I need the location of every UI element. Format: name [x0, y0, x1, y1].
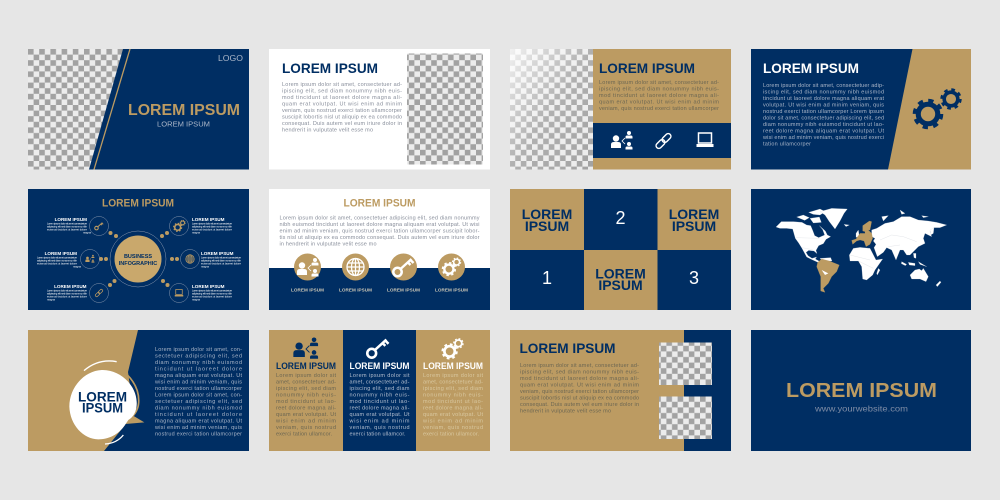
icon: gears badge [438, 254, 465, 280]
right labels: magna [201, 266, 209, 268]
panel: slide 10 three columns [269, 330, 490, 451]
panel: slide 11 text and two photos [510, 330, 731, 451]
right labels: Lorem ipsum dolor sit amet consectetuer [192, 288, 232, 292]
center hub: BUSINESS [124, 254, 152, 260]
panel: slide 4 text and gears [751, 49, 971, 170]
left labels: Lorem ipsum dolor sit amet consectetuer [47, 222, 87, 226]
icon rings [80, 216, 200, 302]
column: second: nonummy nibh euis- [350, 392, 410, 398]
column: third: amet, consectetuer ad- [423, 380, 483, 386]
body text: nostrud exerci tation ullamcorper [155, 386, 242, 392]
panel: slide 2 text and photo [269, 49, 490, 170]
left labels: adipiscing elit sed diam nonummy nibh [47, 292, 88, 296]
column: third: Lorem ipsum dolor sit [423, 373, 483, 379]
body text: quam erat volutpat. Ut wisi enim ad minim [520, 382, 639, 388]
icon captions: LOREM IPSUM [339, 288, 372, 292]
body text: dolor sit amet, consectetuer adipiscing elit, sed [763, 116, 884, 122]
left labels: adipiscing elit sed diam nonummy nibh [47, 224, 88, 228]
gold diagonal stripe [94, 49, 130, 170]
right labels: LOREM IPSUM [201, 251, 234, 256]
body text: iscing elit, sed diam nonummy nibh euismod [763, 90, 884, 96]
column: second: mod tincidunt ut lao- [350, 399, 410, 405]
body text: veniam, quis nostrud exerci tation ullamcorper [599, 106, 719, 112]
tile text top left: IPSUM [525, 218, 569, 234]
column: first: amet, consectetuer ad- [276, 380, 336, 386]
tile text bottom center: LOREM [595, 266, 646, 282]
body text: quam erat volutpat. Ut wisi enim ad minim [599, 100, 719, 106]
icon: laptop [696, 133, 714, 147]
heading: LOREM IPSUM [102, 198, 174, 210]
left labels: euismod tincidunt ut laoreet dolore [47, 294, 88, 298]
column: first: veniam, quis nostrud [276, 425, 336, 431]
column: third: ipiscing elit, sed diam [423, 386, 483, 392]
tile text top right [669, 206, 719, 234]
left labels: euismod tincidunt ut laoreet dolore [47, 228, 88, 232]
body text: Lorem ipsum dolor sit amet, con- [155, 392, 242, 398]
column: third: quam erat volutpat. Ut [423, 412, 483, 418]
body text: mod tincidunt ut laoreet dolore magna ali- [282, 95, 402, 101]
right labels: euismod tincidunt ut laoreet dolore [201, 262, 242, 266]
column: first: LOREM IPSUM [276, 361, 336, 371]
body text: hendrerit in vulputate velit esse mo [520, 408, 611, 414]
heading: LOREM IPSUM [282, 60, 378, 76]
world map [776, 208, 947, 292]
icon captions: LOREM IPSUM [387, 288, 420, 292]
right labels: euismod tincidunt ut laoreet dolore [192, 294, 233, 298]
body text: enim ad minim veniam, quis nostrud exerci tation ullamcorper suscipit lobor- [280, 228, 480, 234]
center hub: INFOGRAPHIC [119, 261, 157, 267]
heading: LOREM IPSUM [599, 60, 695, 76]
body text: diam nonummy nibh euismod [155, 360, 242, 366]
column: first [269, 330, 343, 451]
column: third: LOREM IPSUM [423, 361, 483, 371]
column: second: LOREM IPSUM [350, 361, 410, 371]
body text: tincidunt ut laoreet dolore magna aliquam erat [763, 96, 884, 102]
panel: slide 9 speech bubble [28, 330, 249, 451]
body text: wisi enim ad minim veniam, quis [154, 380, 242, 386]
body text: Lorem ipsum dolor sit amet, consectetuer ad- [520, 363, 639, 369]
tile text top right: LOREM [669, 206, 719, 222]
panel: slide 12 closing [751, 330, 971, 451]
panel: slide 5 business infographic [28, 189, 249, 310]
column: second: ipiscing elit, sed diam [350, 386, 410, 392]
body text: suscipit lobortis nisl ut aliquip ex ea commodo [520, 396, 639, 402]
body text: hendrerit in vulputate velit esse mo [282, 128, 373, 134]
body text: tincidunt ut laoreet dolore [155, 412, 242, 418]
column: third: veniam, quis nostrud [423, 425, 483, 431]
column: first: mod tincidunt ut lao- [276, 399, 336, 405]
left labels: Lorem ipsum dolor sit amet consectetuer [37, 256, 77, 260]
body text: nibh euismod tincidunt ut laoreet dolore magna aliquam erat volutpat. Ut wisi [280, 222, 480, 228]
icon: key badge [390, 254, 417, 280]
icon: link [655, 132, 672, 150]
left labels: LOREM IPSUM [54, 284, 87, 289]
body text: quam erat volutpat. Ut wisi enim ad minim [282, 102, 402, 108]
column: third: nonummy nibh euis- [423, 392, 483, 398]
body text: wisi enim ad minim veniam, quis nostrud exerci [762, 135, 884, 141]
body text: consequat. Duis autem vel eum iriure dolor in [520, 402, 639, 408]
ring icons [85, 220, 194, 297]
body text: wisi enim ad minim veniam, quis [154, 425, 242, 431]
number 3: 3 [689, 268, 699, 288]
photo placeholder bottom [659, 396, 712, 439]
column: second: wisi enim ad minim [348, 418, 410, 424]
left labels: LOREM IPSUM [45, 251, 77, 256]
body text: diam nonummy nibh euismod [155, 406, 242, 412]
body text: reet dolore magna aliquam erat volutpat. Ut [763, 128, 884, 134]
body text [154, 347, 242, 438]
left labels [37, 217, 91, 302]
body text: mod tincidunt ut laoreet dolore magna ali- [599, 93, 719, 99]
body text [520, 363, 639, 414]
left labels: magna [73, 266, 81, 268]
column: first: nonummy nibh euis- [276, 392, 336, 398]
left labels: Lorem ipsum dolor sit amet consectetuer [47, 288, 87, 292]
column: first: quam erat volutpat. Ut [276, 412, 336, 418]
body text [599, 80, 719, 112]
right labels: adipiscing elit sed diam nonummy nibh [201, 258, 242, 262]
body text: Lorem ipsum dolor sit amet, consectetuer ad- [599, 80, 719, 86]
photo placeholder [407, 54, 483, 164]
heading: LOREM IPSUM [763, 60, 859, 76]
photo placeholder top [659, 342, 712, 385]
body text: veniam, quis nostrud exerci tation ullamcorper [520, 389, 639, 395]
heading: LOREM IPSUM [344, 198, 416, 210]
website: www.yourwebsite.com [814, 404, 908, 414]
icon: gears [914, 90, 960, 128]
body text: veniam, quis nostrud exerci tation ullamcorper [282, 108, 402, 114]
left labels: euismod tincidunt ut laoreet dolore [37, 262, 78, 266]
body text: suscipit lobortis nisl ut aliquip ex ea commodo [282, 114, 402, 120]
body text: mod tincidunt ut laoreet dolore magna ali- [520, 376, 639, 382]
column: first: reet dolore magna ali- [276, 406, 336, 412]
speech bubble: LOREM [78, 390, 127, 404]
body text: Lorem ipsum dolor sit amet, con- [155, 347, 242, 353]
right labels: magna [192, 232, 200, 234]
column: second: amet, consectetuer ad- [350, 380, 410, 386]
body text: ipiscing elit, sed diam nonummy nibh euis- [520, 370, 639, 376]
body text: magna aliquam erat volutpat. Ut [155, 418, 242, 424]
closing title: LOREM IPSUM [786, 380, 937, 402]
right labels: Lorem ipsum dolor sit amet consectetuer [192, 222, 232, 226]
column: third [416, 330, 490, 451]
speech bubble: IPSUM [82, 400, 123, 416]
body text: sectetuer adipiscing elit, sed [155, 399, 242, 405]
column: first: ipiscing elit, sed diam [276, 386, 336, 392]
column: second: reet dolore magna ali- [350, 406, 410, 412]
right labels: adipiscing elit sed diam nonummy nibh [192, 292, 233, 296]
tile text top left: LOREM [522, 206, 572, 222]
photo placeholder [28, 49, 123, 170]
right labels [192, 217, 242, 302]
column: second: quam erat volutpat. Ut [350, 412, 410, 418]
cover title: LOREM IPSUM [128, 102, 240, 119]
column: second: exerci tation ullamcor. [350, 432, 406, 438]
right labels: euismod tincidunt ut laoreet dolore [192, 228, 233, 232]
right labels: Lorem ipsum dolor sit amet consectetuer [201, 256, 241, 260]
number 2: 2 [615, 208, 626, 228]
body text [282, 82, 402, 134]
icon: globe badge [342, 254, 369, 280]
body text: ipiscing elit, sed diam nonummy nibh euis- [599, 86, 719, 92]
column: third: exerci tation ullamcor. [423, 432, 479, 438]
column: first: exerci tation ullamcor. [276, 432, 332, 438]
body text [762, 83, 884, 148]
column: third: mod tincidunt ut lao- [423, 399, 483, 405]
logo: LOGO [218, 54, 243, 63]
icon captions: LOREM IPSUM [435, 288, 468, 292]
body text: tincidunt ut laoreet dolore [155, 366, 242, 372]
body text: diam nonummy nibh euismod tincidunt ut lao- [763, 122, 884, 128]
connector dots [99, 231, 179, 287]
right labels: adipiscing elit sed diam nonummy nibh [192, 224, 233, 228]
icon: network badge [294, 254, 321, 280]
left labels: magna [47, 298, 55, 302]
body text: Lorem ipsum dolor sit amet, consectetuer adip- [763, 83, 884, 89]
column: first: wisi enim ad minim [275, 418, 336, 424]
column: third: wisi enim ad minim [422, 418, 483, 424]
body text: nostrud exerci tation ullamcorper [155, 432, 242, 438]
number 1: 1 [542, 268, 552, 288]
icon band [593, 123, 731, 158]
body text: consequat. Duis autem vel eum iriure dolor in [282, 121, 402, 127]
column: second: veniam, quis nostrud [350, 425, 410, 431]
left labels: magna [83, 232, 91, 234]
center hub [110, 231, 166, 287]
column: second: Lorem ipsum dolor sit [350, 373, 410, 379]
heading: LOREM IPSUM [520, 340, 616, 356]
tile text bottom center: IPSUM [598, 277, 643, 293]
body text: in hendrerit in vulputate velit esse mo [280, 242, 376, 248]
left labels: LOREM IPSUM [55, 217, 87, 222]
right labels: LOREM IPSUM [192, 284, 225, 289]
right labels: LOREM IPSUM [192, 217, 225, 222]
panel: slide 7 checker grid [510, 189, 731, 310]
body text: nostrud exerci tation ullamcorper Lorem ipsum [763, 109, 884, 115]
body text: tis nisl ut aliquip ex ea commodo consequat. Duis autem vel eum iriure dolor [280, 235, 480, 241]
cover subtitle: LOREM IPSUM [157, 120, 210, 128]
body text: ipiscing elit, sed diam nonummy nibh euis- [282, 88, 402, 94]
panel: slide 8 world map [751, 189, 971, 310]
column: third: reet dolore magna ali- [423, 406, 483, 412]
tile text bottom center [595, 266, 646, 293]
speech bubble [69, 361, 144, 444]
column: second [343, 330, 416, 451]
tile text top left [522, 206, 572, 234]
icon captions: LOREM IPSUM [291, 288, 324, 292]
body text: magna aliquam erat volutpat. Ut [155, 373, 242, 379]
body text [280, 216, 480, 248]
icon captions [291, 288, 468, 292]
tile text top right: IPSUM [672, 218, 716, 234]
body text: volutpat. Ut wisi enim ad minim veniam, quis [763, 102, 884, 108]
panel: slide 3 photo and icons [510, 49, 731, 170]
column: first: Lorem ipsum dolor sit [276, 373, 336, 379]
icon: network [611, 131, 632, 150]
body text: Lorem ipsum dolor sit amet, consectetuer adipiscing elit, sed diam nonummy [280, 216, 480, 222]
photo placeholder [510, 49, 593, 170]
right labels: magna [192, 298, 200, 302]
body text: tation ullamcorper [763, 142, 811, 148]
panel: slide 1 cover [28, 49, 249, 170]
body text: Lorem ipsum dolor sit amet, consectetuer ad- [282, 82, 402, 88]
left labels: adipiscing elit sed diam nonummy nibh [37, 258, 78, 262]
body text: sectetuer adipiscing elit, sed [155, 354, 242, 360]
panel: slide 6 four icons [269, 189, 490, 310]
